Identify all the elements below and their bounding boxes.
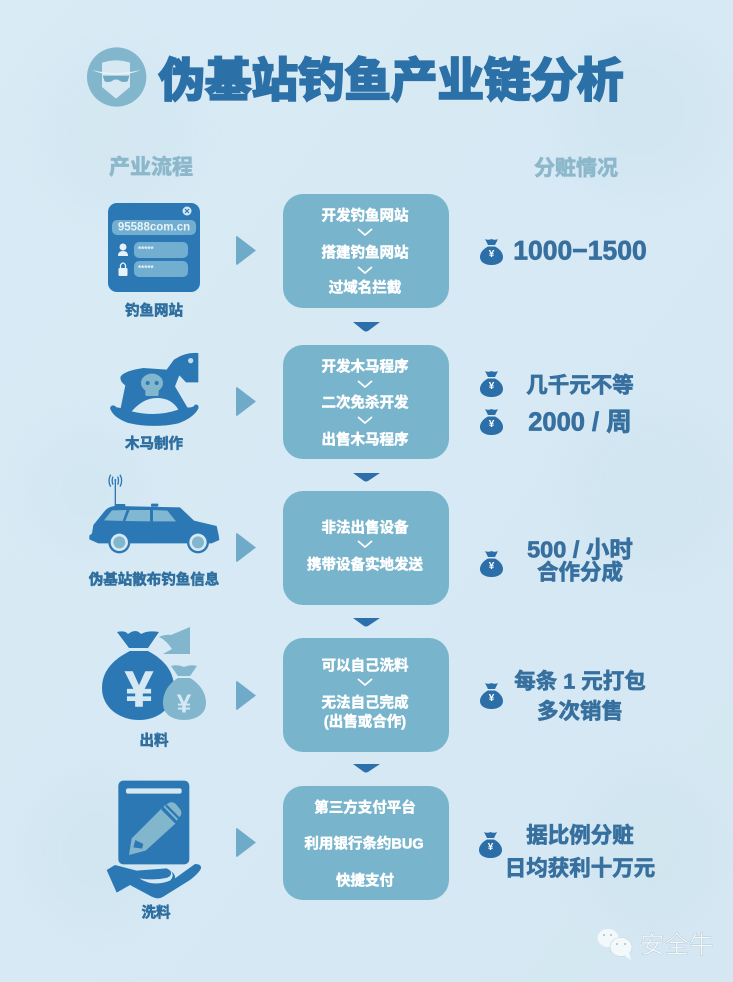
label: selling data: 出料 <box>140 732 169 750</box>
arrow: down 2 <box>353 473 380 482</box>
arrow: row 3 <box>236 533 256 562</box>
panel: step 5 process: 快捷支付 <box>336 872 394 890</box>
arrow: row 2 <box>236 387 256 416</box>
panel: step 2 process: 出售木马程序 <box>322 430 408 448</box>
icon: money bag row 3 <box>480 551 503 577</box>
icon: masked spy logo <box>87 47 146 107</box>
panel: step 3 process: 携带设备实地发送 <box>307 556 423 574</box>
icon: money bag row 4: ¥ <box>489 693 495 704</box>
panel: phishing website icon: ***** <box>138 264 154 273</box>
arrow: down 1 <box>353 322 380 332</box>
panel: step 5 process <box>283 786 449 900</box>
icon: money bag row 3: ¥ <box>489 561 495 572</box>
value: 500 per hour, shared: 合作分成 <box>537 560 623 584</box>
arrow: row 5 <box>236 828 256 857</box>
value: 2000 per week: 2000 / 周 <box>528 408 632 436</box>
panel: step 1 process: 过域名拦截 <box>329 278 402 296</box>
heading: process column: 产业流程 <box>109 156 193 179</box>
arrow: row 4 <box>236 681 256 710</box>
value: 500 per hour, shared: 500 / 小时 <box>527 536 633 562</box>
panel: step 2 process: 二次免杀开发 <box>322 394 409 412</box>
panel: step 4 process: (出售或合作) <box>324 712 406 730</box>
watermark: wechat account: 安全牛 <box>640 931 714 959</box>
watermark: wechat account <box>598 929 714 960</box>
panel: step 1 process: 搭建钓鱼网站 <box>322 244 409 262</box>
heading: revenue share column: 分赃情况 <box>534 157 618 180</box>
label: phishing website: 钓鱼网站 <box>125 302 183 320</box>
icon: money bag row 2a: ¥ <box>489 381 495 392</box>
label: fake base station sends phishing messages: 伪基站散布钓鱼信息 <box>89 570 219 588</box>
value: 1000-1500: 1000−1500 <box>513 236 647 266</box>
icon: money bag row 1: ¥ <box>489 249 495 260</box>
label: trojan making: 木马制作 <box>125 436 183 452</box>
icon: money bags with arrow <box>102 627 206 720</box>
value: one yuan per record, sold repeatedly: 每条 1 元打包 <box>514 670 646 694</box>
value: several thousand: 几千元不等 <box>526 374 634 398</box>
value: proportional share, daily profit: 日均获利十万元 <box>505 856 655 880</box>
panel: step 2 process: 开发木马程序 <box>322 358 408 376</box>
value: proportional share, daily profit <box>505 824 655 880</box>
icon: money bag row 2b: ¥ <box>489 419 495 430</box>
icon: money bag row 2a <box>480 371 503 397</box>
arrow: down 4 <box>353 764 380 772</box>
label: money laundering: 洗料 <box>142 904 171 922</box>
icon: money bag row 1 <box>480 239 503 265</box>
icon: money bag row 4 <box>480 683 503 709</box>
panel: phishing website icon: ***** <box>138 245 154 254</box>
value: 500 per hour, shared <box>527 536 633 584</box>
icon: rocking horse <box>110 353 199 426</box>
icon: money bag row 5: ¥ <box>488 842 494 853</box>
value: proportional share, daily profit: 据比例分赃 <box>526 824 634 848</box>
panel: step 5 process: 第三方支付平台 <box>314 798 416 816</box>
panel: step 4 process: 可以自己洗料 <box>322 656 409 674</box>
panel: step 2 process <box>283 345 449 459</box>
icon: money bags with arrow: ¥ <box>177 688 192 718</box>
panel: phishing website icon <box>108 203 200 292</box>
icon: car with antenna <box>89 475 219 553</box>
icon: money bag row 2b <box>480 409 503 435</box>
panel: step 4 process <box>283 638 449 752</box>
icon: money bags with arrow: ¥ <box>125 662 153 718</box>
icon: tablet with pencil on hand <box>107 781 201 898</box>
panel: step 1 process <box>283 194 449 308</box>
arrow: row 1 <box>236 236 256 265</box>
panel: step 5 process: 利用银行条约BUG <box>304 834 424 852</box>
panel: step 1 process: 开发钓鱼网站 <box>322 206 409 224</box>
panel: step 4 process: 无法自己完成 <box>322 694 409 712</box>
title: 伪基站钓鱼产业链分析 <box>158 54 624 106</box>
icon: money bag row 5 <box>479 832 502 858</box>
value: one yuan per record, sold repeatedly: 多次销售 <box>537 700 623 724</box>
panel: step 3 process: 非法出售设备 <box>322 518 409 536</box>
value: one yuan per record, sold repeatedly <box>514 670 646 724</box>
panel: phishing website icon: 95588com.cn <box>118 222 190 234</box>
panel: step 3 process <box>283 491 449 605</box>
arrow: down 3 <box>353 618 380 626</box>
